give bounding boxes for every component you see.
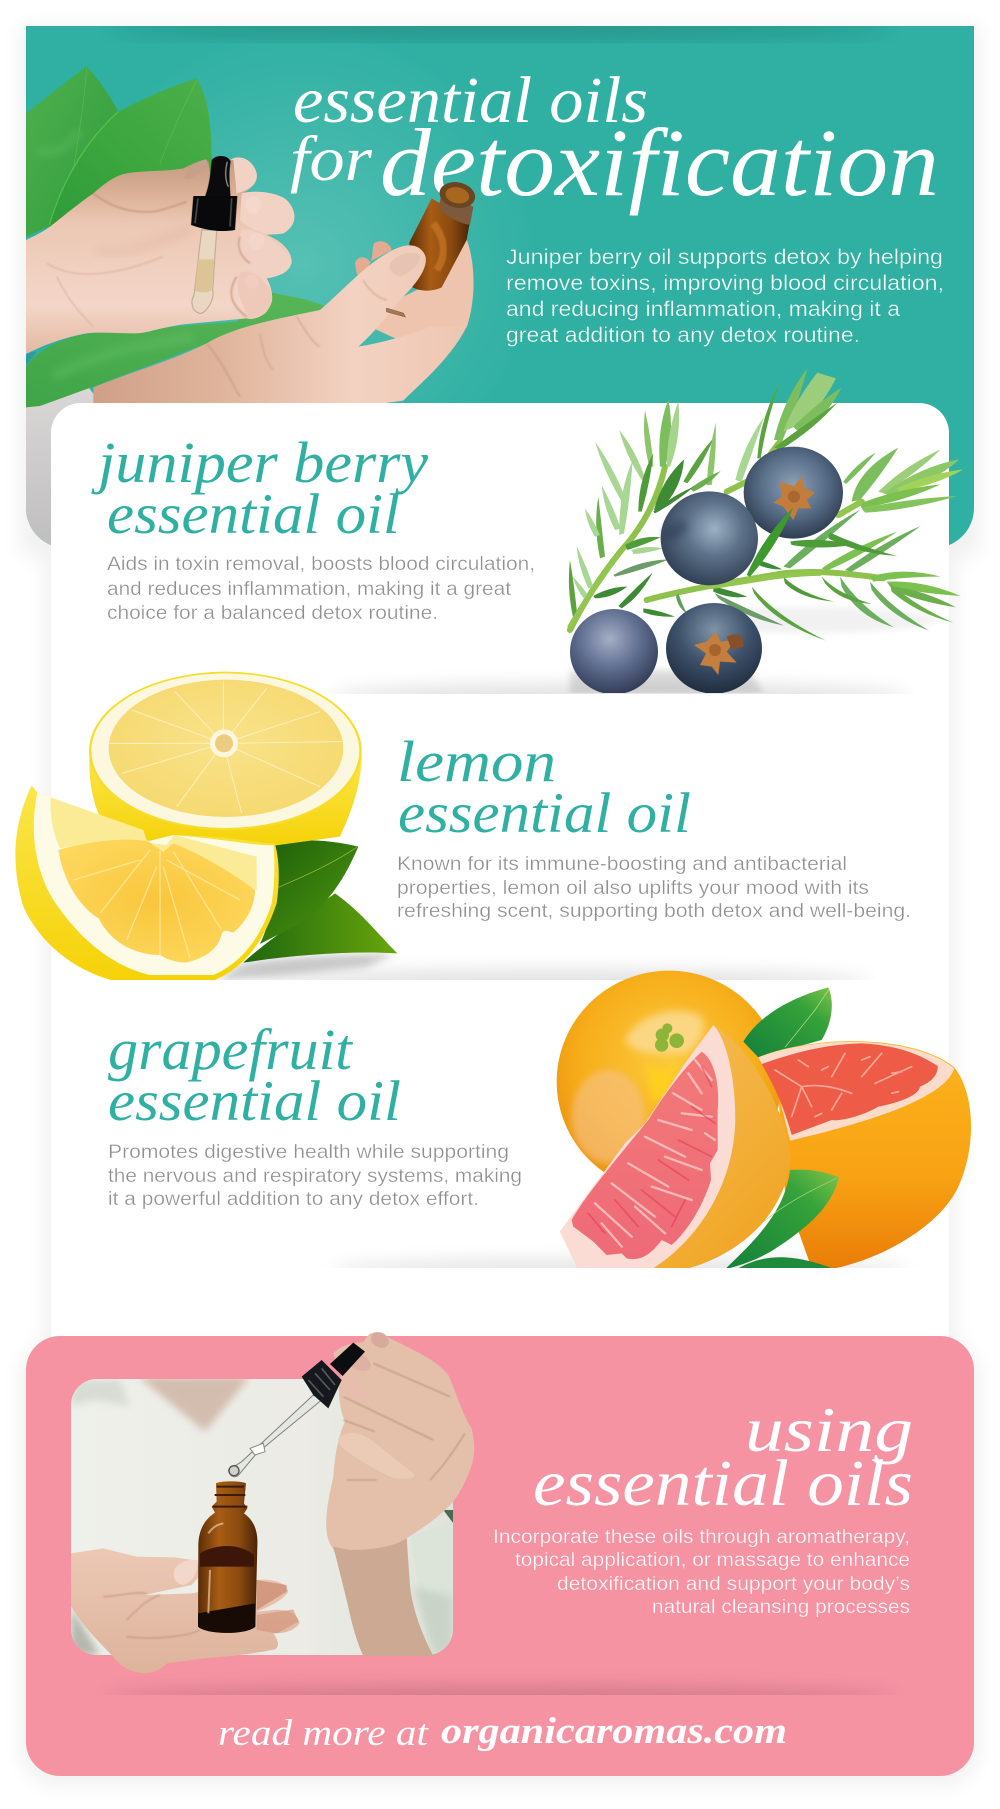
panel: using essential oils — [26, 1329, 974, 1776]
back fingers — [376, 240, 474, 338]
photo: dropper over bottle — [71, 1329, 474, 1673]
lemon half — [89, 753, 362, 847]
juniper description: choice for a balanced detox routine. — [107, 603, 438, 624]
title — [290, 64, 939, 216]
grapefruit half — [758, 1041, 971, 1268]
sleeve — [26, 388, 94, 545]
berry 4 — [666, 603, 762, 694]
berry 3 — [570, 609, 658, 694]
hero teal background — [26, 26, 974, 548]
grapefruit description: it a powerful addition to any detox effort. — [108, 1189, 479, 1210]
icon: lemon half wedge and leaves — [15, 672, 397, 981]
pink description: detoxification and support your body’s — [557, 1573, 910, 1595]
lemon description: properties, lemon oil also uplifts your mood with its — [397, 878, 869, 899]
pink heading: using — [745, 1394, 913, 1465]
pink description: Incorporate these oils through aromatherapy, — [493, 1526, 910, 1548]
pink description — [493, 1526, 910, 1618]
lemon heading: lemon — [397, 729, 556, 794]
lemon heading: essential oil — [398, 782, 691, 845]
lemon heading — [397, 729, 691, 845]
shadow divider 1 — [344, 679, 896, 694]
panel: white card — [51, 403, 949, 1345]
grapefruit description: Promotes digestive health while supporting — [108, 1142, 509, 1163]
dropper glass — [228, 1395, 322, 1477]
juniper description — [107, 554, 535, 624]
lower leaves — [738, 1257, 832, 1268]
berry 1 — [744, 447, 843, 539]
lemon leaves — [243, 893, 397, 963]
grapefruit heading: grapefruit — [108, 1017, 354, 1082]
panel: juniper berry — [90, 368, 963, 694]
raising hand — [326, 1332, 474, 1656]
grapefruit wedge — [560, 1025, 791, 1269]
juniper heading: essential oil — [107, 483, 400, 546]
shadow divider 2 — [264, 965, 856, 980]
panel: hero — [26, 17, 974, 560]
dropper — [191, 156, 237, 313]
title: detoxification — [380, 109, 939, 216]
right hand — [93, 245, 467, 403]
icon: green leaves — [26, 67, 325, 407]
shirt background — [71, 1379, 453, 1655]
juniper heading: juniper berry — [90, 430, 428, 495]
holding hand — [71, 1548, 299, 1673]
footer link — [218, 1711, 787, 1754]
grapefruit description: the nervous and respiratory systems, making — [108, 1166, 522, 1187]
hero description: and reducing inflammation, making it a — [506, 298, 900, 321]
title: for — [290, 123, 373, 194]
fingers — [230, 157, 257, 193]
hero description: remove toxins, improving blood circulation, — [506, 272, 944, 295]
whole grapefruit — [556, 970, 779, 1172]
dropper cap — [302, 1360, 342, 1408]
juniper heading — [90, 430, 428, 546]
pink background — [26, 1336, 974, 1776]
footer link: read more at — [218, 1713, 430, 1754]
shadow divider 3 — [348, 1254, 892, 1268]
hero description: Juniper berry oil supports detox by helping — [506, 246, 943, 269]
left hand — [26, 157, 294, 354]
hero top shadow — [136, 26, 864, 44]
icon: grapefruit whole half wedge leaves — [557, 971, 971, 1270]
panel: lemon — [15, 672, 911, 981]
stem — [655, 1023, 684, 1052]
grapefruit description — [108, 1142, 522, 1210]
amber bottle — [198, 1481, 257, 1633]
small fingertips — [355, 241, 392, 275]
hero description: great addition to any detox routine. — [506, 324, 860, 347]
pink heading — [533, 1394, 913, 1520]
photo: hands with dropper and bottle — [26, 156, 478, 403]
title: essential oils — [293, 64, 648, 137]
icon: juniper branch with berries — [569, 368, 963, 694]
hero description — [506, 246, 944, 347]
juniper description: Aids in toxin removal, boosts blood circulation, — [107, 554, 535, 575]
juniper description: and reduces inflammation, making it a great — [107, 579, 512, 600]
lemon description: Known for its immune-boosting and antibacterial — [397, 854, 847, 875]
footer shadow — [118, 1680, 882, 1695]
footer link: organicaromas.com — [441, 1711, 787, 1752]
lemon description — [397, 854, 911, 922]
roller bottle — [409, 179, 478, 291]
lemon wedge — [15, 785, 279, 981]
lemon description: refreshing scent, supporting both detox and well-being. — [397, 901, 911, 922]
top leaf — [743, 987, 832, 1057]
panel: grapefruit — [108, 971, 971, 1270]
berry 2 — [661, 491, 758, 585]
grapefruit heading: essential oil — [108, 1070, 401, 1133]
pink description: topical application, or massage to enhance — [515, 1549, 910, 1571]
grapefruit heading — [108, 1017, 401, 1133]
pink heading: essential oils — [533, 1447, 913, 1520]
pink description: natural cleansing processes — [652, 1596, 910, 1618]
